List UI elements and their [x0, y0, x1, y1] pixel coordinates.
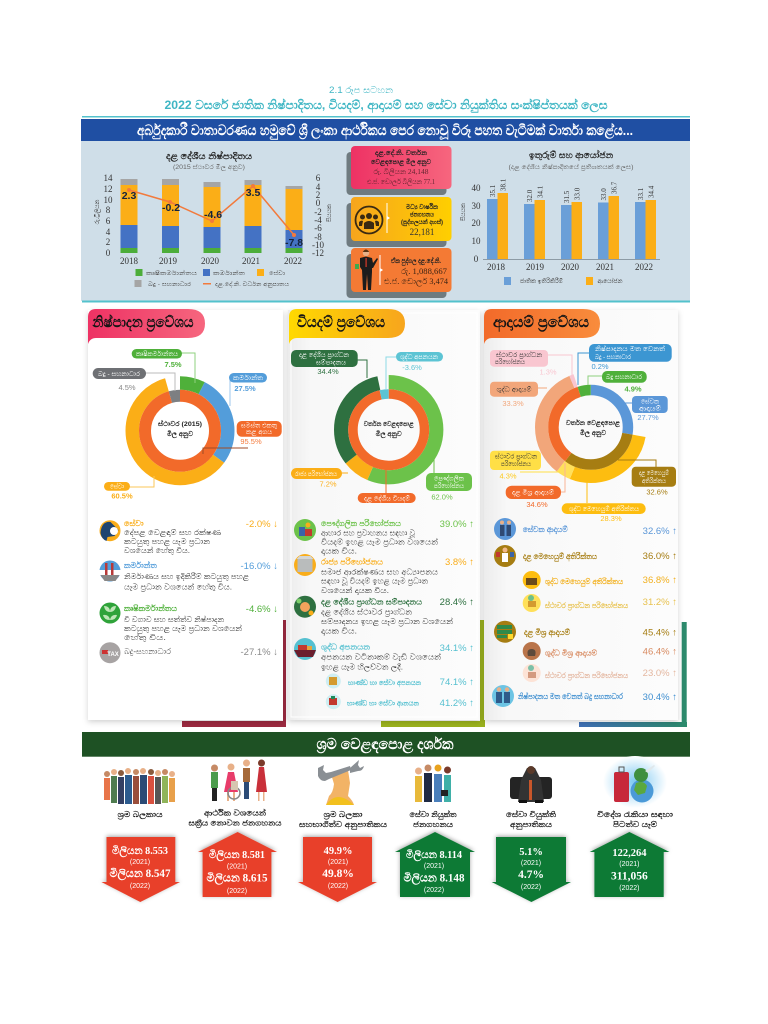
arrow: increase: [395, 832, 475, 897]
indicator: labour force participation rate: සහභාගිත්ව අනුපාතිකය: [299, 819, 388, 830]
sub-item: net operating surplus: [523, 571, 677, 589]
callouts: ශුද්ධ අපනයන: [400, 353, 439, 361]
item: compensation: [494, 518, 677, 540]
item: taxes and subsidies: [100, 642, 278, 663]
card: mid-year population: 22,181: [410, 227, 434, 237]
chart: GDP stacked bars and growth line: -7.8: [285, 237, 303, 249]
item: compensation: 32.6% ↑: [643, 526, 677, 537]
card: GDP at market prices: වෙළඳපොළ මිල අනුව: [371, 158, 431, 167]
item: government consumption: රාජ්‍ය පරිභෝජනය: [321, 556, 383, 566]
icon: services: [100, 520, 120, 541]
arrow: increase: මිලියන 8.615: [206, 870, 268, 886]
heading: [289, 309, 405, 344]
item: services: [100, 518, 278, 555]
heading: [484, 309, 600, 344]
indicator: labour force participation rate: ශ්‍රම බලකා: [323, 809, 363, 821]
chart: GDP stacked bars and growth line: 2.3: [122, 190, 136, 202]
item: gross operating surplus: දළ මෙහෙයුම් අතිරික්තය: [523, 551, 597, 563]
chart: savings and investment: 10: [472, 236, 481, 246]
chart: GDP stacked bars and growth line: -6: [314, 223, 322, 233]
icon: capital: [294, 596, 316, 618]
panel: macro overview background: [81, 141, 690, 301]
sub-item: fixed capital consumption: [523, 594, 677, 612]
banner headline: [81, 119, 690, 141]
callouts: 27.7%: [637, 413, 659, 422]
item: industry: යෑම ප්‍රධාන වශයෙන් හේතු විය.: [124, 581, 232, 592]
donut chart: වර්තන වෙළඳපොළ: [364, 420, 414, 428]
item: gross mixed income: [494, 621, 677, 643]
item: gross operating surplus: [494, 545, 677, 567]
callouts: -3.6%: [402, 363, 422, 372]
chart: GDP stacked bars and growth line: 6: [316, 173, 321, 183]
arrow: increase: 311,056: [611, 870, 648, 882]
panel: expenditure approach: [288, 309, 485, 727]
callouts: පරිභෝජනය: [501, 460, 531, 468]
callouts: 62.0%: [431, 492, 453, 502]
section heading: labour market: ශ්‍රම වෙළඳපොළ දර්ශක: [316, 735, 454, 754]
chart: savings and investment: 32.0: [526, 189, 534, 202]
arrow: increase: [590, 832, 670, 897]
sub-item: imports: 41.2% ↑: [440, 698, 474, 709]
callouts: පරිභෝජනය: [495, 358, 525, 366]
callouts: [291, 350, 472, 503]
item: net exports: ඉහළ යෑම හිලව්වන ලදී.: [321, 662, 403, 672]
chart: GDP stacked bars and growth line: 2018: [120, 256, 138, 266]
sub-item: imports: [326, 694, 474, 709]
chart: savings and investment: (දළ දේශීය නිෂ්පාදිතයේ ප්‍රතිශතයක් ලෙස): [508, 164, 634, 172]
sub-item: net operating surplus: 36.8% ↑: [643, 575, 677, 586]
chart: GDP stacked bars and growth line: 2: [316, 190, 320, 200]
chart: GDP stacked bars and growth line: කෘෂිකර්මාන්තය: [146, 270, 197, 277]
item: net exports: 34.1% ↑: [440, 643, 474, 654]
callouts: කර්මාන්ත: [233, 374, 264, 382]
sub-item: exports: 74.1% ↑: [440, 677, 474, 688]
donut chart: [542, 378, 640, 476]
chart: GDP stacked bars and growth line: 10: [104, 195, 113, 205]
callouts: දළ මෙහෙයුම්: [639, 469, 669, 478]
callouts: 27.5%: [234, 384, 256, 393]
item: capital formation: 28.4% ↑: [440, 597, 474, 608]
2018: [120, 248, 138, 253]
arrow: increase: 122,264: [612, 848, 647, 859]
item: net exports: [294, 638, 474, 709]
callouts: සම්පාදනය: [316, 358, 346, 366]
chart: GDP stacked bars and growth line: බදු - සහනාධාර: [148, 281, 192, 288]
icon: suitcase and globe: [603, 756, 667, 808]
item: government consumption: 3.8% ↑: [445, 557, 474, 568]
item: services: -2.0% ↓: [246, 519, 278, 530]
arrow: decrease: [298, 837, 377, 902]
callouts: 4.9%: [624, 384, 642, 394]
callouts: 4.3%: [499, 472, 517, 480]
indicator: economically inactive population: [188, 760, 282, 897]
arrow: decrease: (2021): [328, 859, 348, 866]
chart: savings and investment: 33.1: [637, 187, 645, 200]
callouts: 60.5%: [111, 492, 133, 500]
sub-item: exports: භාණ්ඩ හා සේවා අපනයන: [348, 679, 421, 688]
item: capital formation: [294, 596, 474, 636]
item: services: දේපළ වෙළඳාම් සහ රක්ෂණ: [124, 527, 222, 538]
chart: savings and investment: 40: [472, 183, 481, 193]
indicator: economically inactive population: ආර්ථික වශයෙන්: [204, 807, 267, 818]
callouts: 34.4%: [317, 367, 339, 376]
donut chart: මිල අනුව: [376, 430, 402, 439]
chart: GDP stacked bars and growth line: 6: [106, 216, 111, 226]
chart: savings and investment: 2020: [561, 262, 580, 272]
arrow: decrease: (2021): [130, 859, 150, 866]
arrow: decrease: 4.7%: [518, 869, 544, 881]
chart: savings and investment: 34.4: [648, 185, 656, 198]
chart: GDP stacked bars and growth line: 14: [104, 173, 113, 183]
chart: GDP stacked bars and growth line: 2: [106, 237, 110, 247]
arrow: decrease: 5.1%: [519, 847, 543, 858]
callouts: රාජ්‍ය පරිභෝජනය: [295, 470, 337, 478]
callouts: 32.6%: [646, 488, 668, 496]
indicator: employed population: සේවා නියුක්ත: [410, 809, 457, 820]
item: industry: කර්මාන්ත: [123, 560, 157, 570]
callouts: පෞද්ගලික: [434, 474, 465, 482]
panel: income approach: [484, 309, 687, 727]
arrow: increase: මිලියන 8.114: [406, 848, 463, 863]
indicator: unemployment rate: සේවා වියුක්ති: [506, 809, 557, 820]
chart: savings and investment: සියයක: [460, 203, 467, 221]
arrow: increase: (2021): [619, 861, 640, 868]
arrow: decrease: [101, 837, 180, 902]
chart: GDP stacked bars and growth line: 2021: [242, 256, 260, 266]
chart: GDP stacked bars and growth line: -8: [314, 232, 322, 242]
callouts: 0.2%: [591, 362, 609, 371]
arrow: decrease: (2022): [521, 884, 541, 891]
arrow: increase: (2022): [227, 888, 247, 895]
arrow: increase: මිලියන 8.581: [209, 848, 265, 863]
item: other taxes: 30.4% ↑: [643, 692, 677, 703]
icon: handshake: [492, 685, 514, 707]
callouts: බදු - සහනාධාර: [98, 371, 140, 378]
arrow: increase: [198, 832, 277, 897]
callouts: කෘෂිකර්මාන්තය: [136, 350, 178, 358]
panel: production approach: [88, 309, 286, 727]
item: taxes and subsidies: බදු-සහනාධාර: [124, 647, 171, 656]
callouts: 7.5%: [164, 360, 182, 369]
chart: GDP stacked bars and growth line: සියයක: [326, 204, 333, 222]
item: government consumption: වශයෙන් දායක විය.: [321, 585, 389, 595]
heading: වියදම් ප්‍රවේශය: [297, 314, 385, 333]
item: government consumption: සමාජ ආරක්ෂණය සහ අධ්‍යාපනය: [321, 566, 439, 578]
icon: employees: [494, 518, 516, 540]
arrow: decrease: (2022): [328, 883, 348, 890]
chart: GDP stacked bars and growth line: 0: [316, 198, 321, 208]
item: agriculture: -4.6% ↓: [246, 604, 278, 615]
chart: savings and investment: 31.5: [563, 190, 571, 203]
indicator: employed population: [395, 764, 475, 897]
callouts: [490, 344, 676, 523]
item: capital formation: දායක විය.: [321, 626, 357, 636]
item: private consumption: දායක විය.: [321, 546, 357, 556]
card: GDP at market prices: එ.ජ. ඩොලර් බිලියන 77.1: [367, 178, 435, 186]
icon: cargo ship: [294, 638, 316, 660]
item: private consumption: වියදම් ඉහළ යෑම ප්‍රධාන වශයෙන්: [321, 536, 439, 548]
main title: 2022 වසරේ ජාතික නිෂ්පාදිතය, වියදම්, ආදායම් සහ සේවා නියුක්තිය සංක්ෂිප්තයක් ලෙස: [164, 98, 608, 114]
indicator: labour force participation rate: [298, 760, 388, 902]
item: industry: නිර්මාණය සහ ඉදිකිරීම් කටයුතු පහළ: [124, 571, 249, 582]
item: government consumption: [294, 554, 474, 595]
indicator: economically inactive population: සක්‍රීය නොවන ජනගහනය: [188, 818, 282, 828]
item: taxes and subsidies: -27.1% ↓: [240, 647, 278, 658]
card: GDP at market prices: [346, 146, 452, 195]
icon: industry: [100, 560, 120, 582]
callouts: දළ දේශීය වියදම්: [364, 494, 410, 502]
arrow: decrease: (2021): [521, 860, 541, 867]
card: per capita GDP: [346, 248, 452, 298]
chart: GDP stacked bars and growth line: සේවා: [269, 270, 285, 277]
icon: shopping: [294, 519, 316, 541]
indicator: unemployment rate: [492, 766, 571, 902]
arrow: decrease: මිලියන 8.547: [110, 866, 171, 882]
callouts: දළ දේශීය ප්‍රාග්ධන: [299, 351, 350, 360]
donut chart: මිල අනුව: [167, 430, 193, 439]
donut chart: [132, 383, 228, 478]
icon: agriculture: [100, 602, 120, 624]
arrow: increase: මිලියන 8.148: [404, 870, 465, 886]
arrow: decrease: 49.9%: [324, 846, 352, 857]
callouts: සේවා: [110, 482, 124, 490]
icon: workers: [415, 764, 451, 802]
item: services: කටයුතු පහළ යෑම ප්‍රධාන: [124, 537, 211, 547]
sub-item: net mixed income: ශුද්ධ මිශ්‍ර ආදායම්: [545, 647, 598, 658]
chart: GDP stacked bars and growth line: -4.6: [204, 209, 222, 221]
2019: [162, 248, 179, 253]
indicator: labour force: ශ්‍රම බලකාය: [117, 809, 163, 821]
icon: tax: [100, 642, 120, 663]
item: capital formation: සම්පාදනය ඉහළ යෑම ප්‍රධාන වශයෙන්: [321, 616, 454, 627]
item: capital formation: දළ දේශීය ස්ථාවර ප්‍රාග්ධන: [321, 606, 413, 618]
2022: [286, 248, 302, 253]
callouts: ස්ථාවර ප්‍රාග්ධන: [496, 351, 543, 360]
callouts: 95.5%: [240, 437, 262, 446]
card: mid-year population: [346, 197, 452, 247]
indicator: foreign employment departures: පිටත්ව යෑම්: [612, 819, 658, 829]
chart: GDP stacked bars and growth line: -12: [312, 248, 324, 258]
icon: government building: [294, 554, 316, 576]
chart: savings and investment: [460, 149, 660, 285]
donut chart: ස්ථාවර (2015): [158, 420, 202, 428]
chart: GDP stacked bars and growth line: -2: [314, 207, 322, 217]
sub-item: fixed capital consumption: ස්ථාවර ප්‍රාග්ධන පරිභෝජනය: [545, 670, 629, 681]
card: per capita GDP: එ.ජ. ඩොලර් 3,474: [384, 276, 448, 287]
callouts: [93, 349, 282, 500]
item: agriculture: [100, 602, 278, 642]
callouts: කළ අගය: [246, 429, 272, 436]
item: private consumption: පෞද්ගලික පරිභෝජනය: [321, 518, 401, 530]
chart: GDP stacked bars and growth line: දළ.දේ.නි. වර්ධන අනුපාතය: [215, 281, 289, 289]
item: agriculture: කෘෂිකර්මාන්තය: [123, 603, 177, 613]
card: per capita GDP: රු. 1,088,667: [401, 267, 447, 276]
callouts: පරිභෝජනය: [434, 482, 464, 490]
chart: GDP stacked bars and growth line: 2019: [159, 256, 178, 266]
chart: savings and investment: ජාතික ඉතිරිකිරීම්: [520, 277, 564, 285]
arrow: decrease: [492, 837, 571, 902]
arrow: increase: (2022): [424, 887, 444, 894]
card: GDP at market prices: රු. බිලියන 24,148: [374, 168, 429, 176]
item: services: වශයෙන් හේතු විය.: [124, 545, 190, 555]
card: GDP at market prices: දළ.දේ.නි. වර්තන: [375, 149, 428, 157]
item: gross mixed income: දළ මිශ්‍ර ආදායම්: [524, 627, 570, 639]
item: private consumption: [294, 518, 474, 556]
chart: GDP stacked bars and growth line: -4: [314, 215, 322, 225]
sub-item: fixed capital consumption: 31.2% ↑: [643, 597, 677, 608]
item: industry: [100, 560, 278, 592]
icon: stressed man: [510, 766, 552, 803]
icon: people: [356, 206, 382, 234]
item: net exports: අපනයන වටිනාකම් වැඩි වශයෙන්: [321, 651, 442, 662]
sub-item: net mixed income: [523, 642, 677, 660]
chart: savings and investment: 38.1: [500, 178, 508, 191]
2020: [204, 248, 220, 253]
donut chart: [341, 382, 436, 477]
chart: GDP stacked bars and growth line: 12: [104, 184, 112, 194]
icon: money: [494, 621, 516, 643]
callouts: 28.3%: [600, 514, 622, 523]
chart: savings and investment: 34.1: [536, 185, 544, 198]
icon: surplus: [494, 545, 516, 567]
item: other taxes: නිෂ්පාදනය මත වෙනත් බදු සහනාධාර: [517, 691, 623, 702]
icon: crowd: [104, 768, 175, 804]
chart: savings and investment: 2018: [487, 262, 506, 272]
chart: savings and investment: ආයෝජන: [598, 278, 623, 285]
chart: savings and investment: 35.1: [489, 184, 497, 197]
arrow: increase: (2021): [227, 864, 247, 870]
callouts: ශුද්ධ මෙහෙයුම් අතිරික්තය: [569, 505, 639, 514]
section heading: labour market: [82, 732, 690, 757]
callouts: 33.3%: [502, 399, 524, 408]
chart: GDP stacked bars and growth line: 8: [106, 205, 111, 215]
callouts: අතිරික්තය: [642, 477, 666, 485]
heading: ආදායම් ප්‍රවේශය: [493, 314, 589, 333]
item: other taxes: [492, 685, 677, 707]
chart: GDP stacked bars and growth line: -10: [312, 240, 324, 250]
indicator: employed population: ජනගහනය: [413, 819, 454, 829]
sub-item: exports: [326, 674, 474, 688]
item: private consumption: 39.0% ↑: [440, 519, 474, 530]
chart: savings and investment: 33.0: [600, 188, 608, 200]
callouts: දළ මිශ්‍ර ආදායම්: [512, 488, 554, 497]
item: compensation: සේවක ආදායම්: [523, 524, 568, 535]
item: capital formation: දළ දේශීය ප්‍රාග්ධන සම්පාදනය: [321, 596, 422, 608]
chart: savings and investment: 36.7: [610, 181, 618, 194]
chart: savings and investment: 2019: [526, 262, 544, 272]
chart: GDP stacked bars and growth line: කර්මාන්ත: [213, 270, 246, 277]
item: gross operating surplus: 36.0% ↑: [643, 551, 677, 562]
callouts: බදු - සහනාධාර: [595, 354, 631, 361]
sub-item: fixed capital consumption: ස්ථාවර ප්‍රාග්ධන පරිභෝජනය: [545, 600, 629, 611]
icon: tax: TAX: [107, 652, 119, 658]
callouts: 34.6%: [526, 500, 548, 509]
callouts: බදු සහනාධාර: [606, 374, 642, 381]
chart: GDP stacked bars and growth line: දළ දේශීය නිෂ්පාදිතය: [166, 150, 253, 163]
item: agriculture: කටයුතු පහළ යෑම ප්‍රධාන වශයෙන්: [124, 623, 243, 634]
arrow: decrease: මිලියන 8.553: [112, 844, 168, 859]
callouts: 1.3%: [539, 368, 557, 376]
icon: family: [211, 760, 267, 801]
heading: නිෂ්පාදන ප්‍රවේශය: [92, 313, 194, 333]
indicator: foreign employment departures: [590, 756, 674, 897]
item: private consumption: ආහාර සහ ප්‍රවාහනය සඳහා වූ: [321, 528, 416, 538]
chart: GDP stacked bars and growth line: 3.5: [246, 187, 260, 199]
sub-item: imports: භාණ්ඩ හා සේවා ආනයන: [347, 699, 419, 708]
card: per capita GDP: ඒක පුද්ගල දළ.දේ.නි.: [391, 256, 441, 266]
donut chart: වර්තන වෙළඳපොළ: [566, 419, 620, 427]
chart: GDP stacked bars and growth line: 0: [106, 248, 111, 258]
arrow: decrease: (2022): [130, 883, 150, 890]
item: services: සේවා: [124, 518, 144, 528]
donut chart: මිල අනුව: [580, 429, 606, 438]
indicator: labour force: [101, 768, 180, 902]
chart: savings and investment: ඉතුරුම් සහ ආයෝජන: [529, 149, 614, 161]
chart: GDP stacked bars and growth line: රු.ට්‍රිලියන: [94, 199, 101, 224]
sub-item: net operating surplus: ශුද්ධ මෙහෙයුම් අතිරික්තය: [545, 576, 624, 587]
callouts: ස්ථාවර ප්‍රාග්ධන: [495, 452, 538, 461]
banner headline: අර්බුදකාරී වාතාවරණය හමුවේ ශ්‍රී ලංකා ආර්ථිකය පෙර නොවූ විරූ පහත වැටීමක් වාර්තා කළේය...: [137, 122, 633, 141]
card: mid-year population: මධ්‍ය වාර්ෂික: [406, 203, 439, 211]
2021: [244, 248, 262, 253]
heading: [88, 309, 205, 344]
chart: GDP stacked bars and growth line: [94, 150, 333, 289]
callouts: 7.2%: [319, 480, 337, 488]
arrow: decrease: 49.8%: [322, 868, 354, 880]
sub-item: fixed capital consumption: 23.0% ↑: [643, 668, 677, 679]
callouts: ශුද්ධ ආදායම්: [496, 385, 532, 394]
chart: GDP stacked bars and growth line: 2020: [201, 256, 220, 266]
figure number: 2.1 රූප සටහන: [329, 85, 393, 95]
indicator: unemployment rate: අනුපාතිකය: [510, 819, 553, 830]
chart: savings and investment: 20: [472, 218, 481, 228]
chart: savings and investment: 33.0: [574, 187, 582, 200]
sub-item: net mixed income: 46.4% ↑: [643, 646, 677, 658]
item: agriculture: වී වගාව සහ සත්ත්ව නිෂ්පාදන: [124, 614, 225, 624]
callouts: සේවක: [641, 397, 660, 406]
arrow: increase: (2022): [619, 885, 640, 892]
chart: GDP stacked bars and growth line: 4: [316, 182, 321, 192]
callouts: 4.5%: [118, 383, 136, 392]
chart: GDP stacked bars and growth line: 4: [106, 227, 111, 237]
chart: savings and investment: 2021: [596, 262, 614, 272]
callouts: සමස්ත එකතු: [241, 421, 278, 430]
callouts: නිෂ්පාදනය මත වෙනත්: [595, 345, 666, 353]
chart: savings and investment: 30: [472, 201, 481, 211]
indicator: foreign employment departures: විදේශ රැකියා සඳහා: [597, 809, 674, 820]
chart: GDP stacked bars and growth line: (2015 ස්ථාවර මිල අනුව): [173, 164, 245, 172]
chart: savings and investment: 0: [474, 254, 479, 264]
icon: businessman: [355, 250, 378, 290]
card: mid-year population: ජනගහනය: [410, 212, 434, 218]
card: mid-year population: (පුද්ගලයන් දහස්): [401, 218, 443, 227]
item: industry: -16.0% ↓: [240, 561, 278, 572]
chart: savings and investment: 2022: [635, 262, 653, 272]
item: government consumption: සඳහා වූ වියදම් ඉහළ යෑම ප්‍රධාන: [321, 576, 429, 586]
sub-item: fixed capital consumption: [523, 664, 677, 682]
icon: wrench in hand: [318, 760, 364, 805]
chart: GDP stacked bars and growth line: -0.2: [162, 202, 180, 214]
arrow: increase: (2021): [424, 863, 444, 870]
chart: GDP stacked bars and growth line: 2022: [284, 256, 302, 266]
callouts: ආදායම්: [639, 404, 661, 412]
item: agriculture: හේතු විය.: [124, 632, 166, 642]
item: gross mixed income: 45.4% ↑: [643, 628, 677, 638]
item: net exports: ශුද්ධ අපනයන: [321, 641, 371, 652]
